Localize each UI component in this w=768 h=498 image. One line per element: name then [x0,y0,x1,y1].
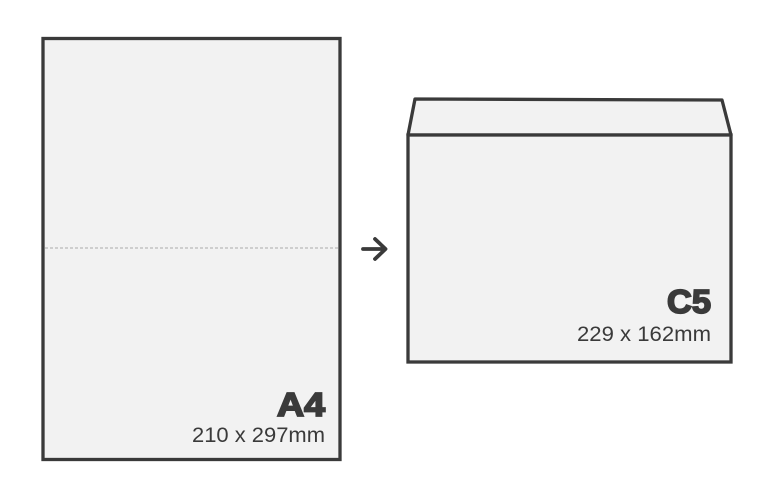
panel: C5 envelope [408,99,731,362]
heading: A4: A4 [277,386,326,423]
text: C5 dimensions: 229 x 162mm [577,323,711,346]
envelope body [408,135,731,362]
heading: C5: C5 [667,283,711,320]
envelope flap [408,99,731,135]
text: A4 dimensions: 210 x 297mm [192,424,325,447]
arrow [363,239,386,259]
panel: A4 sheet [43,38,340,460]
